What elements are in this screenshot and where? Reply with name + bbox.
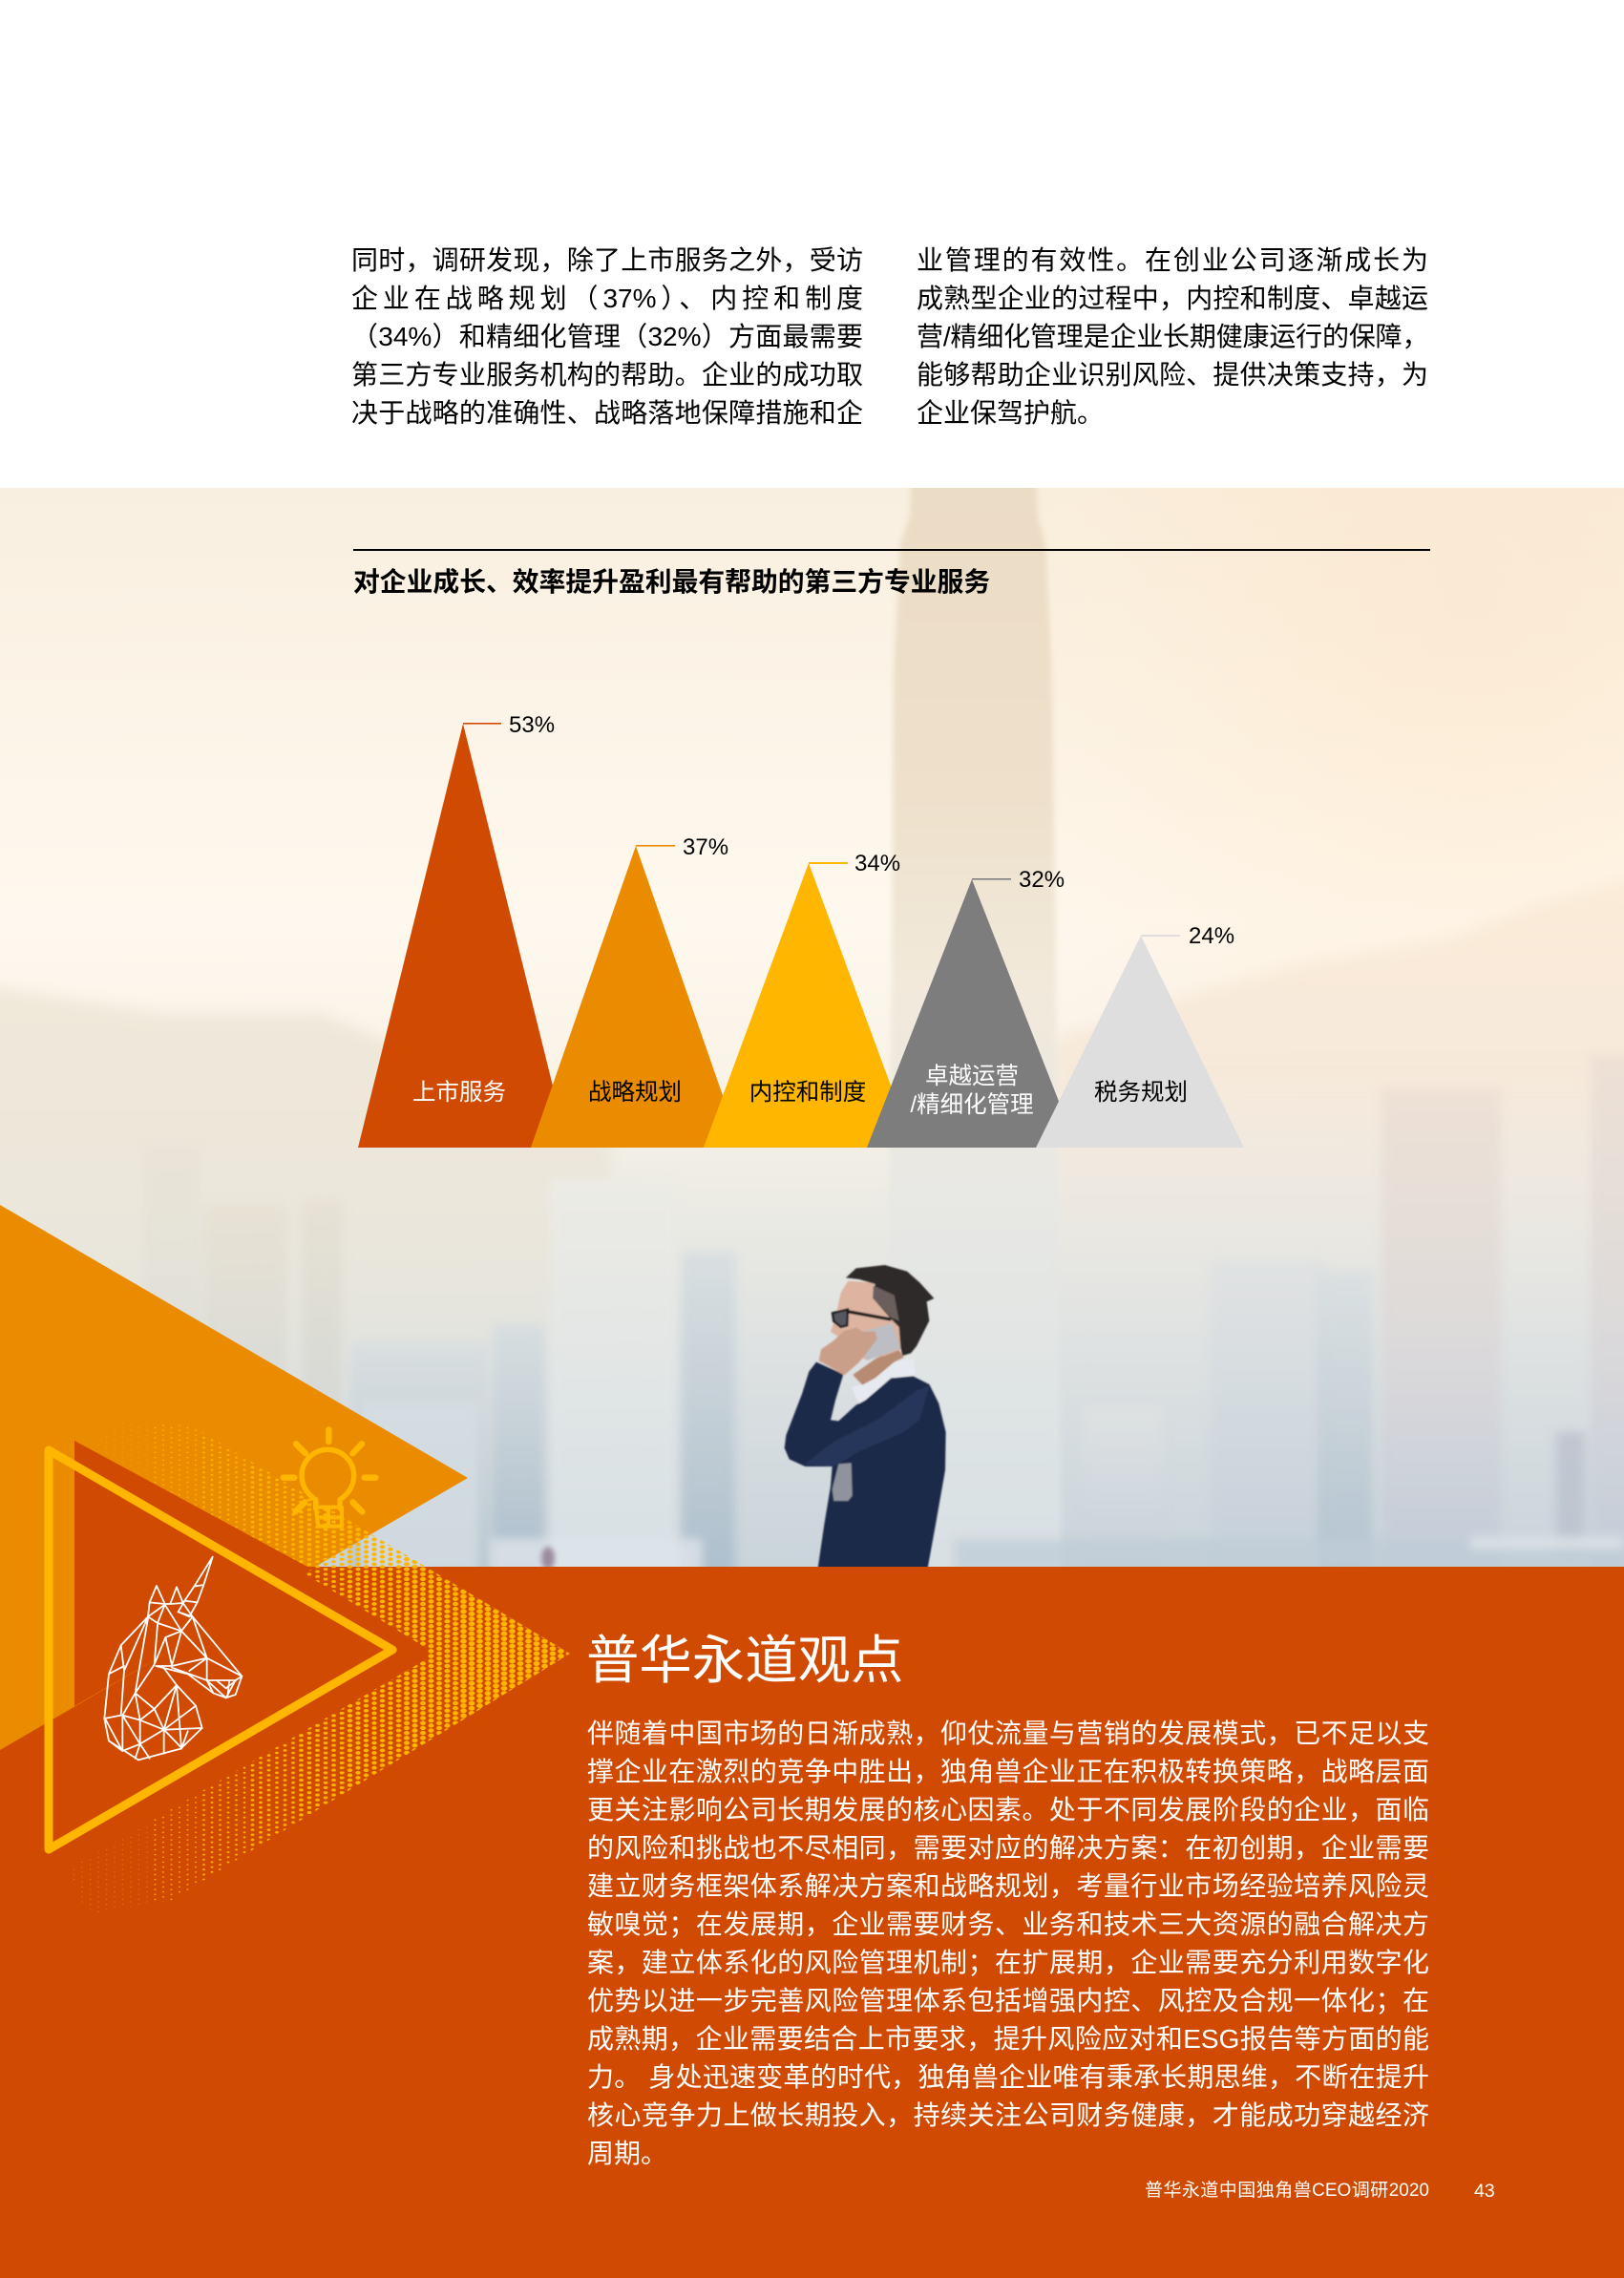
text: PwC viewpoint body paragraph: 的风险和挑战也不尽相同，需要对应的解决方案：在初创期，企业需要 — [587, 1833, 1429, 1863]
text: PwC viewpoint body paragraph: 周期。 — [587, 2139, 667, 2168]
text: intro paragraph, right column: 成熟型企业的过程中，内控和制度、卓越运 — [917, 284, 1428, 313]
value: 53%: 53% — [509, 712, 555, 738]
label: 内控和制度: 内控和制度 — [749, 1080, 866, 1106]
panel: orange band and triangle graphics — [0, 1205, 1624, 2278]
yellow outlined triangle — [49, 1450, 392, 1849]
value: 37%: 37% — [683, 834, 728, 860]
label: 卓越运营/精细化管理: /精细化管理 — [910, 1092, 1034, 1118]
text: intro paragraph, left column: 决于战略的准确性、战略落地保障措施和企 — [351, 398, 863, 428]
dark orange inner triangle — [74, 1441, 316, 1706]
footer: page number: 43 — [1474, 2181, 1495, 2202]
text: intro paragraph, left column: （34%）和精细化管理（32%）方面最需要 — [351, 322, 863, 351]
icon: light bulb — [284, 1429, 375, 1527]
label: 战略规划: 战略规划 — [588, 1080, 682, 1106]
text: intro paragraph, right column: 营/精细化管理是企业长期健康运行的保障， — [917, 322, 1428, 351]
text: intro paragraph, left column — [351, 245, 863, 428]
value: 32%: 32% — [1019, 867, 1065, 893]
bar: 卓越运营/精细化管理 32% — [867, 878, 1077, 1148]
value: 24%: 24% — [1189, 923, 1234, 949]
text: intro paragraph, left column: 企业在战略规划（37%）、内控和制度 — [351, 284, 863, 313]
text: intro paragraph, right column: 企业保驾护航。 — [917, 398, 1104, 428]
icon: wireframe unicorn head — [104, 1557, 242, 1760]
text: intro paragraph, right column: 业管理的有效性。在创业公司逐渐成长为 — [917, 245, 1428, 275]
text: PwC viewpoint body paragraph — [587, 1719, 1429, 2168]
text: intro paragraph, right column — [917, 245, 1428, 428]
bar: 上市服务 53% — [358, 723, 568, 1148]
large orange triangle — [0, 1205, 468, 1750]
text: PwC viewpoint body paragraph: 伴随着中国市场的日渐成熟，仰仗流量与营销的发展模式，已不足以支 — [587, 1719, 1429, 1748]
label: 卓越运营/精细化管理: 卓越运营 — [925, 1064, 1019, 1089]
text: intro paragraph, left column: 同时，调研发现，除了上市服务之外，受访 — [351, 245, 863, 275]
text: PwC viewpoint body paragraph: 成熟期，企业需要结合上市要求，提升风险应对和ESG报告等方面的能 — [587, 2024, 1429, 2054]
bar: 战略规划 37% — [531, 845, 741, 1148]
panel: city skyline photo background — [0, 488, 1624, 1567]
bar: 税务规划 24% — [1036, 935, 1244, 1148]
text: PwC viewpoint body paragraph: 更关注影响公司长期发展的核心因素。处于不同发展阶段的企业，面临 — [587, 1795, 1429, 1825]
text: PwC viewpoint body paragraph: 优势以进一步完善风险管理体系包括增强内控、风控及合规一体化；在 — [587, 1986, 1429, 2015]
text: PwC viewpoint body paragraph: 撑企业在激烈的竞争中胜出，独角兽企业正在积极转换策略，战略层面 — [587, 1757, 1429, 1786]
chart title with top rule: 对企业成长、效率提升盈利最有帮助的第三方专业服务 — [353, 567, 990, 597]
label: 卓越运营/精细化管理 — [910, 1064, 1034, 1118]
text: PwC viewpoint body paragraph: 核心竞争力上做长期投入，持续关注公司财务健康，才能成功穿越经济 — [587, 2100, 1429, 2130]
text: PwC viewpoint body paragraph: 敏嗅觉；在发展期，企业需要财务、业务和技术三大资源的融合解决方 — [587, 1909, 1429, 1939]
label: 上市服务: 上市服务 — [412, 1080, 506, 1106]
orange section band — [0, 1567, 1624, 2278]
text: PwC viewpoint body paragraph: 力。 身处迅速变革的时代，独角兽企业唯有秉承长期思维，不断在提升 — [587, 2062, 1429, 2092]
text: intro paragraph, right column: 能够帮助企业识别风险、提供决策支持，为 — [917, 360, 1428, 390]
footer: report name: 普华永道中国独角兽CEO调研2020 — [1145, 2181, 1429, 2201]
text: intro paragraph, left column: 第三方专业服务机构的帮助。企业的成功取 — [351, 360, 863, 390]
halftone dot arrow — [73, 1423, 570, 1912]
text: PwC viewpoint body paragraph: 建立财务框架体系解决方案和战略规划，考量行业市场经验培养风险灵 — [587, 1871, 1429, 1901]
text: PwC viewpoint body paragraph: 案，建立体系化的风险管理机制；在扩展期，企业需要充分利用数字化 — [587, 1948, 1429, 1977]
bar: 内控和制度 34% — [704, 862, 914, 1148]
label: 税务规划: 税务规划 — [1094, 1080, 1188, 1106]
chart title with top rule — [353, 549, 1430, 601]
value: 34%: 34% — [854, 851, 900, 876]
chart: triangle bar chart of third-party services — [358, 712, 1244, 1148]
heading: 普华永道观点: 普华永道观点 — [586, 1631, 903, 1690]
